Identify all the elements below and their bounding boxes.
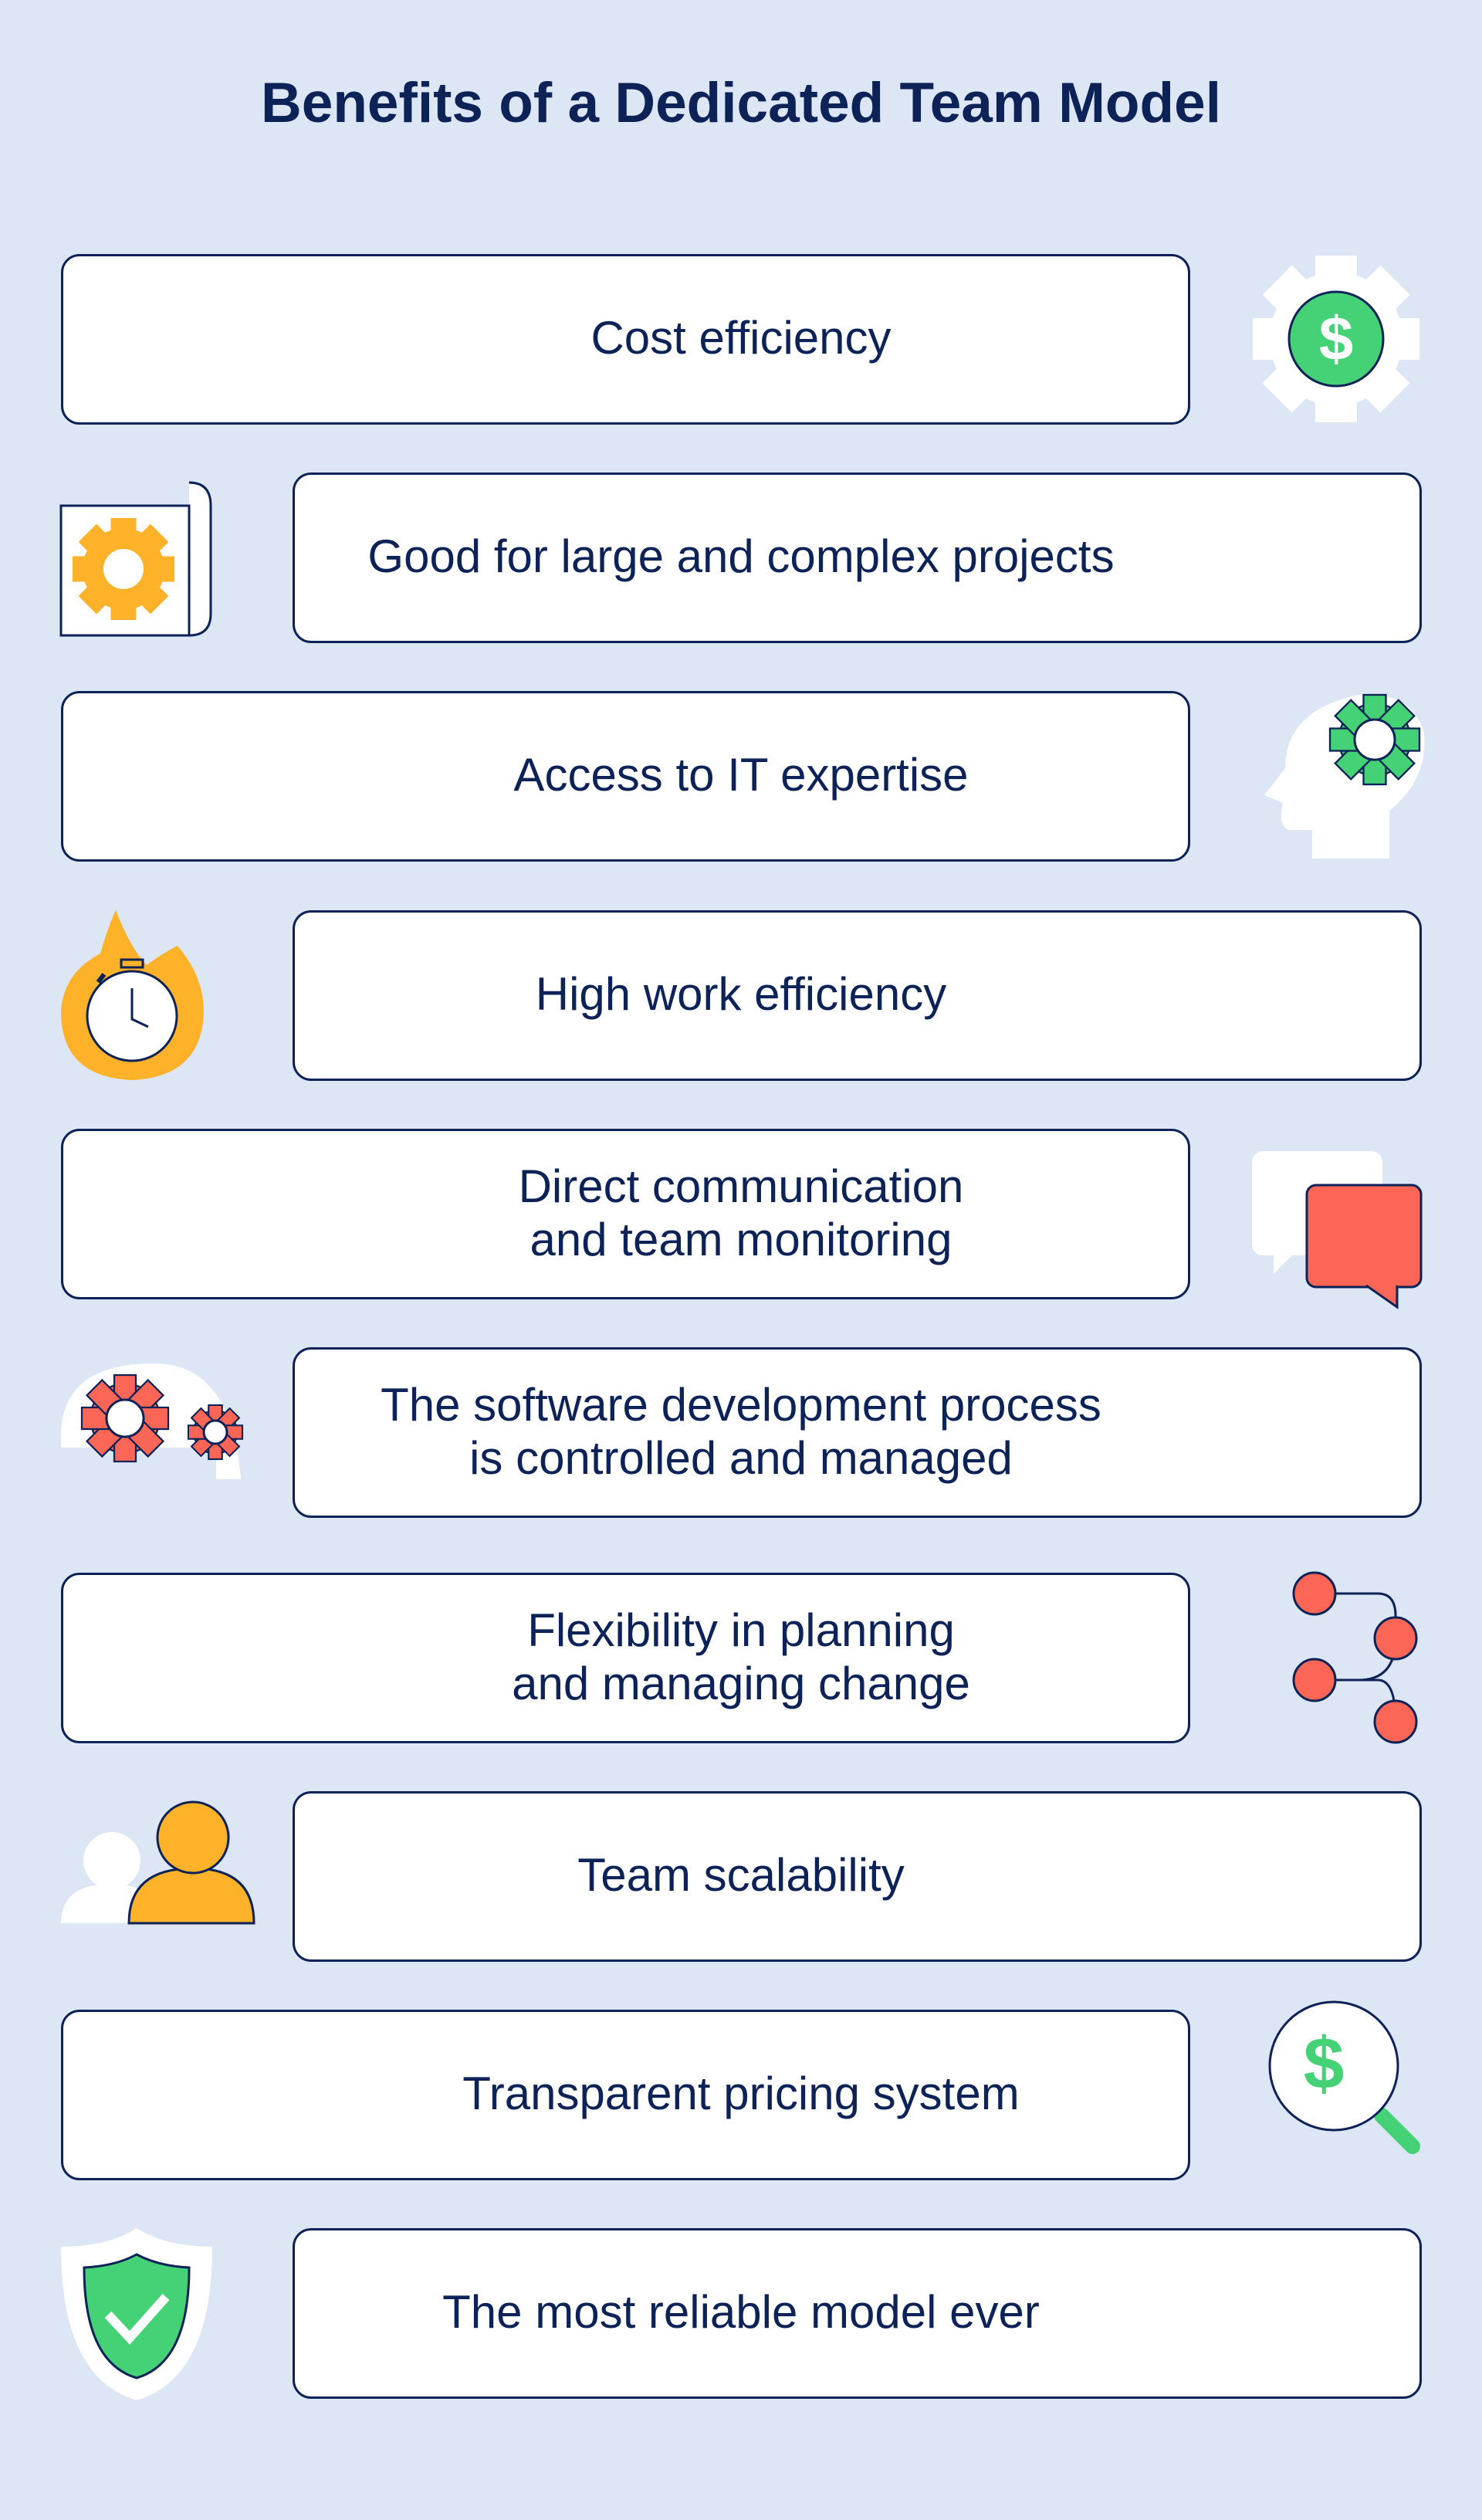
text: flexibility: and managing change: [512, 1658, 970, 1709]
text: cost efficiency: Cost efficiency: [590, 312, 892, 364]
text: communication: and team monitoring: [530, 1214, 952, 1265]
text: large projects: Good for large and complex projects: [367, 530, 1115, 582]
text: process: is controlled and managed: [469, 1432, 1013, 1484]
text: IT expertise: Access to IT expertise: [513, 749, 969, 801]
box: process: [293, 1347, 1422, 1518]
icon: gear with dollar: $: [1319, 304, 1353, 373]
icon: two gears: [61, 1363, 242, 1479]
icon: magnifier with dollar: [1270, 2002, 1413, 2146]
icon: stopwatch with flame: [61, 910, 204, 1080]
box: IT expertise: [61, 691, 1190, 862]
text: scalability: Team scalability: [577, 1849, 905, 1901]
text: pricing: Transparent pricing system: [462, 2068, 1020, 2119]
icon: head with gear: [1264, 695, 1424, 859]
box: reliable: [293, 2228, 1422, 2399]
text: communication: Direct communication: [519, 1160, 963, 1212]
icon: document with gear: [61, 483, 211, 635]
text: process: [381, 1379, 1101, 1484]
text: flexibility: Flexibility in planning: [527, 1604, 955, 1656]
text: process: The software development process: [381, 1379, 1101, 1431]
icon: flow nodes: [1294, 1573, 1416, 1743]
box: large projects: [293, 472, 1422, 643]
box: communication: [61, 1129, 1190, 1299]
icon: shield check: [61, 2228, 212, 2400]
text: communication: [519, 1160, 963, 1265]
icon: gear with dollar: [1253, 256, 1419, 422]
box: scalability: [293, 1791, 1422, 1962]
text: work efficiency: High work efficiency: [536, 968, 946, 1020]
box: work efficiency: [293, 910, 1422, 1081]
box: pricing: [61, 2010, 1190, 2180]
icon: speech bubbles: [1252, 1151, 1421, 1307]
text: flexibility: [512, 1604, 970, 1709]
title: Benefits of a Dedicated Team Model: [261, 72, 1221, 134]
box: cost efficiency: [61, 254, 1190, 425]
box: flexibility: [61, 1573, 1190, 1743]
icon: magnifier with dollar: $: [1304, 2023, 1344, 2105]
text: reliable: The most reliable model ever: [442, 2286, 1040, 2338]
icon: people: [61, 1802, 254, 1923]
